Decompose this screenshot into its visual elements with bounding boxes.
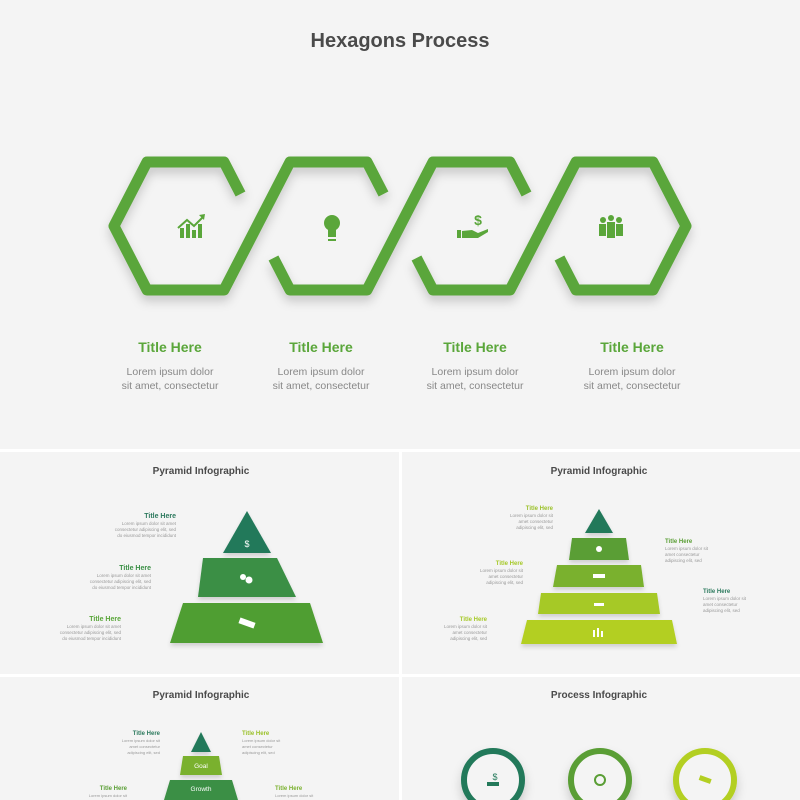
panel: pyramid 2: amet consectetur <box>452 630 487 635</box>
panel: pyramid 2: amet consectetur <box>703 602 738 607</box>
panel: pyramid 2: adipiscing elit, sed <box>450 636 487 641</box>
step 2 text <box>273 339 370 392</box>
icon: chart <box>178 214 205 238</box>
panel: pyramid 2: amet consectetur <box>518 519 553 524</box>
panel: pyramid 2: amet consectetur <box>665 552 700 557</box>
panel: pyramid 3: adipiscing elit, sed <box>127 750 160 755</box>
panel: pyramid 1: do eiusmod tempor incididunt <box>62 636 122 641</box>
panel: pyramid 3: Lorem ipsum dolor sit <box>275 793 314 798</box>
panel: pyramid 1: Lorem ipsum dolor sit amet <box>67 624 122 629</box>
panel: pyramid 2: Lorem ipsum dolor sit <box>480 568 524 573</box>
step 4 text: Lorem ipsum dolor <box>589 366 676 378</box>
icon: hand dollar: $ <box>474 212 482 228</box>
step 4 text <box>584 339 681 392</box>
panel: pyramid 2: Lorem ipsum dolor sit <box>444 624 488 629</box>
panel: pyramid 1: do eiusmod tempor incididunt <box>92 585 152 590</box>
icon: people <box>599 215 623 238</box>
panel: process circles: $ <box>492 772 498 782</box>
icon: bulb <box>324 215 340 241</box>
panel: pyramid 3: Lorem ipsum dolor sit <box>122 738 161 743</box>
step 3 text: Lorem ipsum dolor <box>432 366 519 378</box>
panel: pyramid 3: Title Here <box>242 731 270 737</box>
panel: pyramid 3: amet consectetur <box>242 744 273 749</box>
panel: pyramid 1: Title Here <box>119 565 151 572</box>
panel: pyramid 2: Lorem ipsum dolor sit <box>510 513 554 518</box>
panel: pyramid 2: adipiscing elit, sed <box>486 580 523 585</box>
panel: pyramid 3: amet consectetur <box>129 744 161 749</box>
panel: pyramid 3: Title Here <box>133 731 161 737</box>
panel: pyramid 1: do eiusmod tempor incididunt <box>117 533 177 538</box>
panel: pyramid 3: Title Here <box>275 786 303 792</box>
step 1 text: Lorem ipsum dolor <box>127 366 214 378</box>
panel: pyramid 1: consectetur adipiscing elit, sed <box>115 527 176 532</box>
hexagon chain <box>114 162 686 290</box>
panel: pyramid 2: Title Here <box>526 506 554 512</box>
panel: pyramid 1 <box>60 466 323 643</box>
panel: process circles: Process Infographic <box>551 690 648 701</box>
step 1 text: Title Here <box>138 339 202 355</box>
panel: pyramid 2: Title Here <box>703 589 731 595</box>
panel: pyramid 2: adipiscing elit, sed <box>665 558 702 563</box>
step 2 text: sit amet, consectetur <box>273 380 370 392</box>
title: Hexagons Process <box>311 30 489 52</box>
panel: pyramid 3: Goal <box>194 763 208 770</box>
panel: pyramid 3: Lorem ipsum dolor sit <box>89 793 128 798</box>
panel: pyramid 1: Lorem ipsum dolor sit amet <box>122 521 177 526</box>
step 2 text: Title Here <box>289 339 353 355</box>
step 1 text: sit amet, consectetur <box>122 380 219 392</box>
panel: pyramid 3: Growth <box>191 786 212 793</box>
panel: pyramid 2: adipiscing elit, sed <box>516 525 553 530</box>
panel: pyramid 2: Lorem ipsum dolor sit <box>665 546 709 551</box>
panel: pyramid 3: Title Here <box>100 786 128 792</box>
panel: pyramid 1: Title Here <box>144 513 176 520</box>
panel: pyramid 1: $ <box>244 539 250 549</box>
step 1 text <box>122 339 219 392</box>
panel: pyramid 1: consectetur adipiscing elit, sed <box>60 630 121 635</box>
panel: pyramid 3: adipiscing elit, sed <box>242 750 275 755</box>
panel: pyramid 3: Pyramid Infographic <box>153 690 250 701</box>
panel: pyramid 3: Lorem ipsum dolor sit <box>242 738 281 743</box>
icon: hand dollar <box>457 212 488 238</box>
panel: pyramid 2: Title Here <box>496 561 524 567</box>
panel: pyramid 2: Title Here <box>460 617 488 623</box>
panel: pyramid 2: amet consectetur <box>488 574 523 579</box>
step 3 text: Title Here <box>443 339 507 355</box>
panel: pyramid 2: Lorem ipsum dolor sit <box>703 596 747 601</box>
panel: process circles <box>464 690 734 800</box>
step 4 text: sit amet, consectetur <box>584 380 681 392</box>
step 2 text: Lorem ipsum dolor <box>278 366 365 378</box>
panel: pyramid 1: Lorem ipsum dolor sit amet <box>97 573 152 578</box>
panel: pyramid 1: Pyramid Infographic <box>153 466 250 477</box>
panel: pyramid 2: Pyramid Infographic <box>551 466 648 477</box>
panel: pyramid 3 <box>89 690 314 800</box>
panel: pyramid 1: consectetur adipiscing elit, sed <box>90 579 151 584</box>
step 4 text: Title Here <box>600 339 664 355</box>
panel: pyramid 2: Title Here <box>665 539 693 545</box>
step 3 text <box>427 339 524 392</box>
panel: pyramid 2 <box>444 466 747 644</box>
panel: pyramid 2: adipiscing elit, sed <box>703 608 740 613</box>
panel: pyramid 1: Title Here <box>89 616 121 623</box>
step 3 text: sit amet, consectetur <box>427 380 524 392</box>
